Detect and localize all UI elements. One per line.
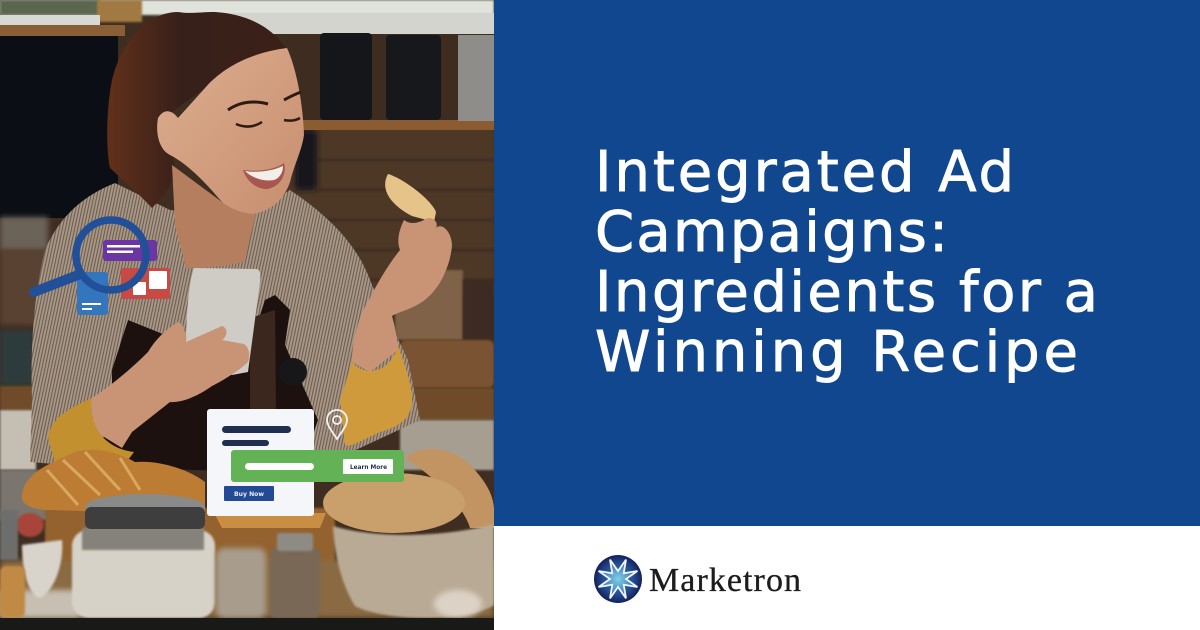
woman: face and neck (157, 48, 304, 214)
jars (72, 530, 215, 618)
title (595, 140, 1098, 385)
buy now button: Buy Now (234, 490, 264, 498)
red card (121, 268, 170, 299)
woman: shirt and apron (30, 183, 420, 472)
counter with baguette, bowl and jars (0, 449, 494, 630)
title: Campaigns: (595, 200, 948, 265)
woman: right forearm and hand holding bread (352, 218, 452, 372)
green banner: Learn More (350, 464, 387, 471)
woman: hair and ponytail (107, 12, 287, 208)
buy now button (224, 486, 274, 501)
woman: mustard right cuff (340, 346, 412, 446)
icon: magnifying glass with ad cards (34, 220, 170, 315)
smartphone (186, 268, 260, 375)
woman: brow and eyes (228, 92, 301, 127)
green banner (231, 450, 404, 482)
purple card (103, 240, 157, 261)
woman: left forearm and hand holding phone (91, 322, 249, 448)
panel: blue title background (494, 0, 1200, 526)
baguette (22, 450, 205, 512)
logo: Marketron (594, 555, 801, 603)
magnifier lens and handle (34, 220, 146, 292)
woman: neck and chest (172, 165, 256, 268)
photo background: kitchen wall and shelves (0, 0, 494, 630)
bread buns (405, 449, 494, 528)
title: Integrated Ad (595, 140, 1014, 205)
title: Winning Recipe (595, 320, 1078, 385)
bowl (333, 524, 494, 618)
title: Ingredients for a (595, 260, 1098, 325)
logo wordmark: Marketron (649, 562, 801, 599)
icon: location pin (327, 410, 347, 439)
panel: kitchen photo of woman with phone and bread (0, 0, 494, 630)
panel: white footer with logo (494, 526, 1200, 630)
ad card with buttons (207, 409, 404, 516)
icon: logo star orb (594, 555, 642, 603)
woman: smile (243, 163, 285, 189)
blue card (77, 272, 108, 315)
bread slice (385, 174, 436, 222)
woman: mustard left cuff (48, 398, 134, 462)
